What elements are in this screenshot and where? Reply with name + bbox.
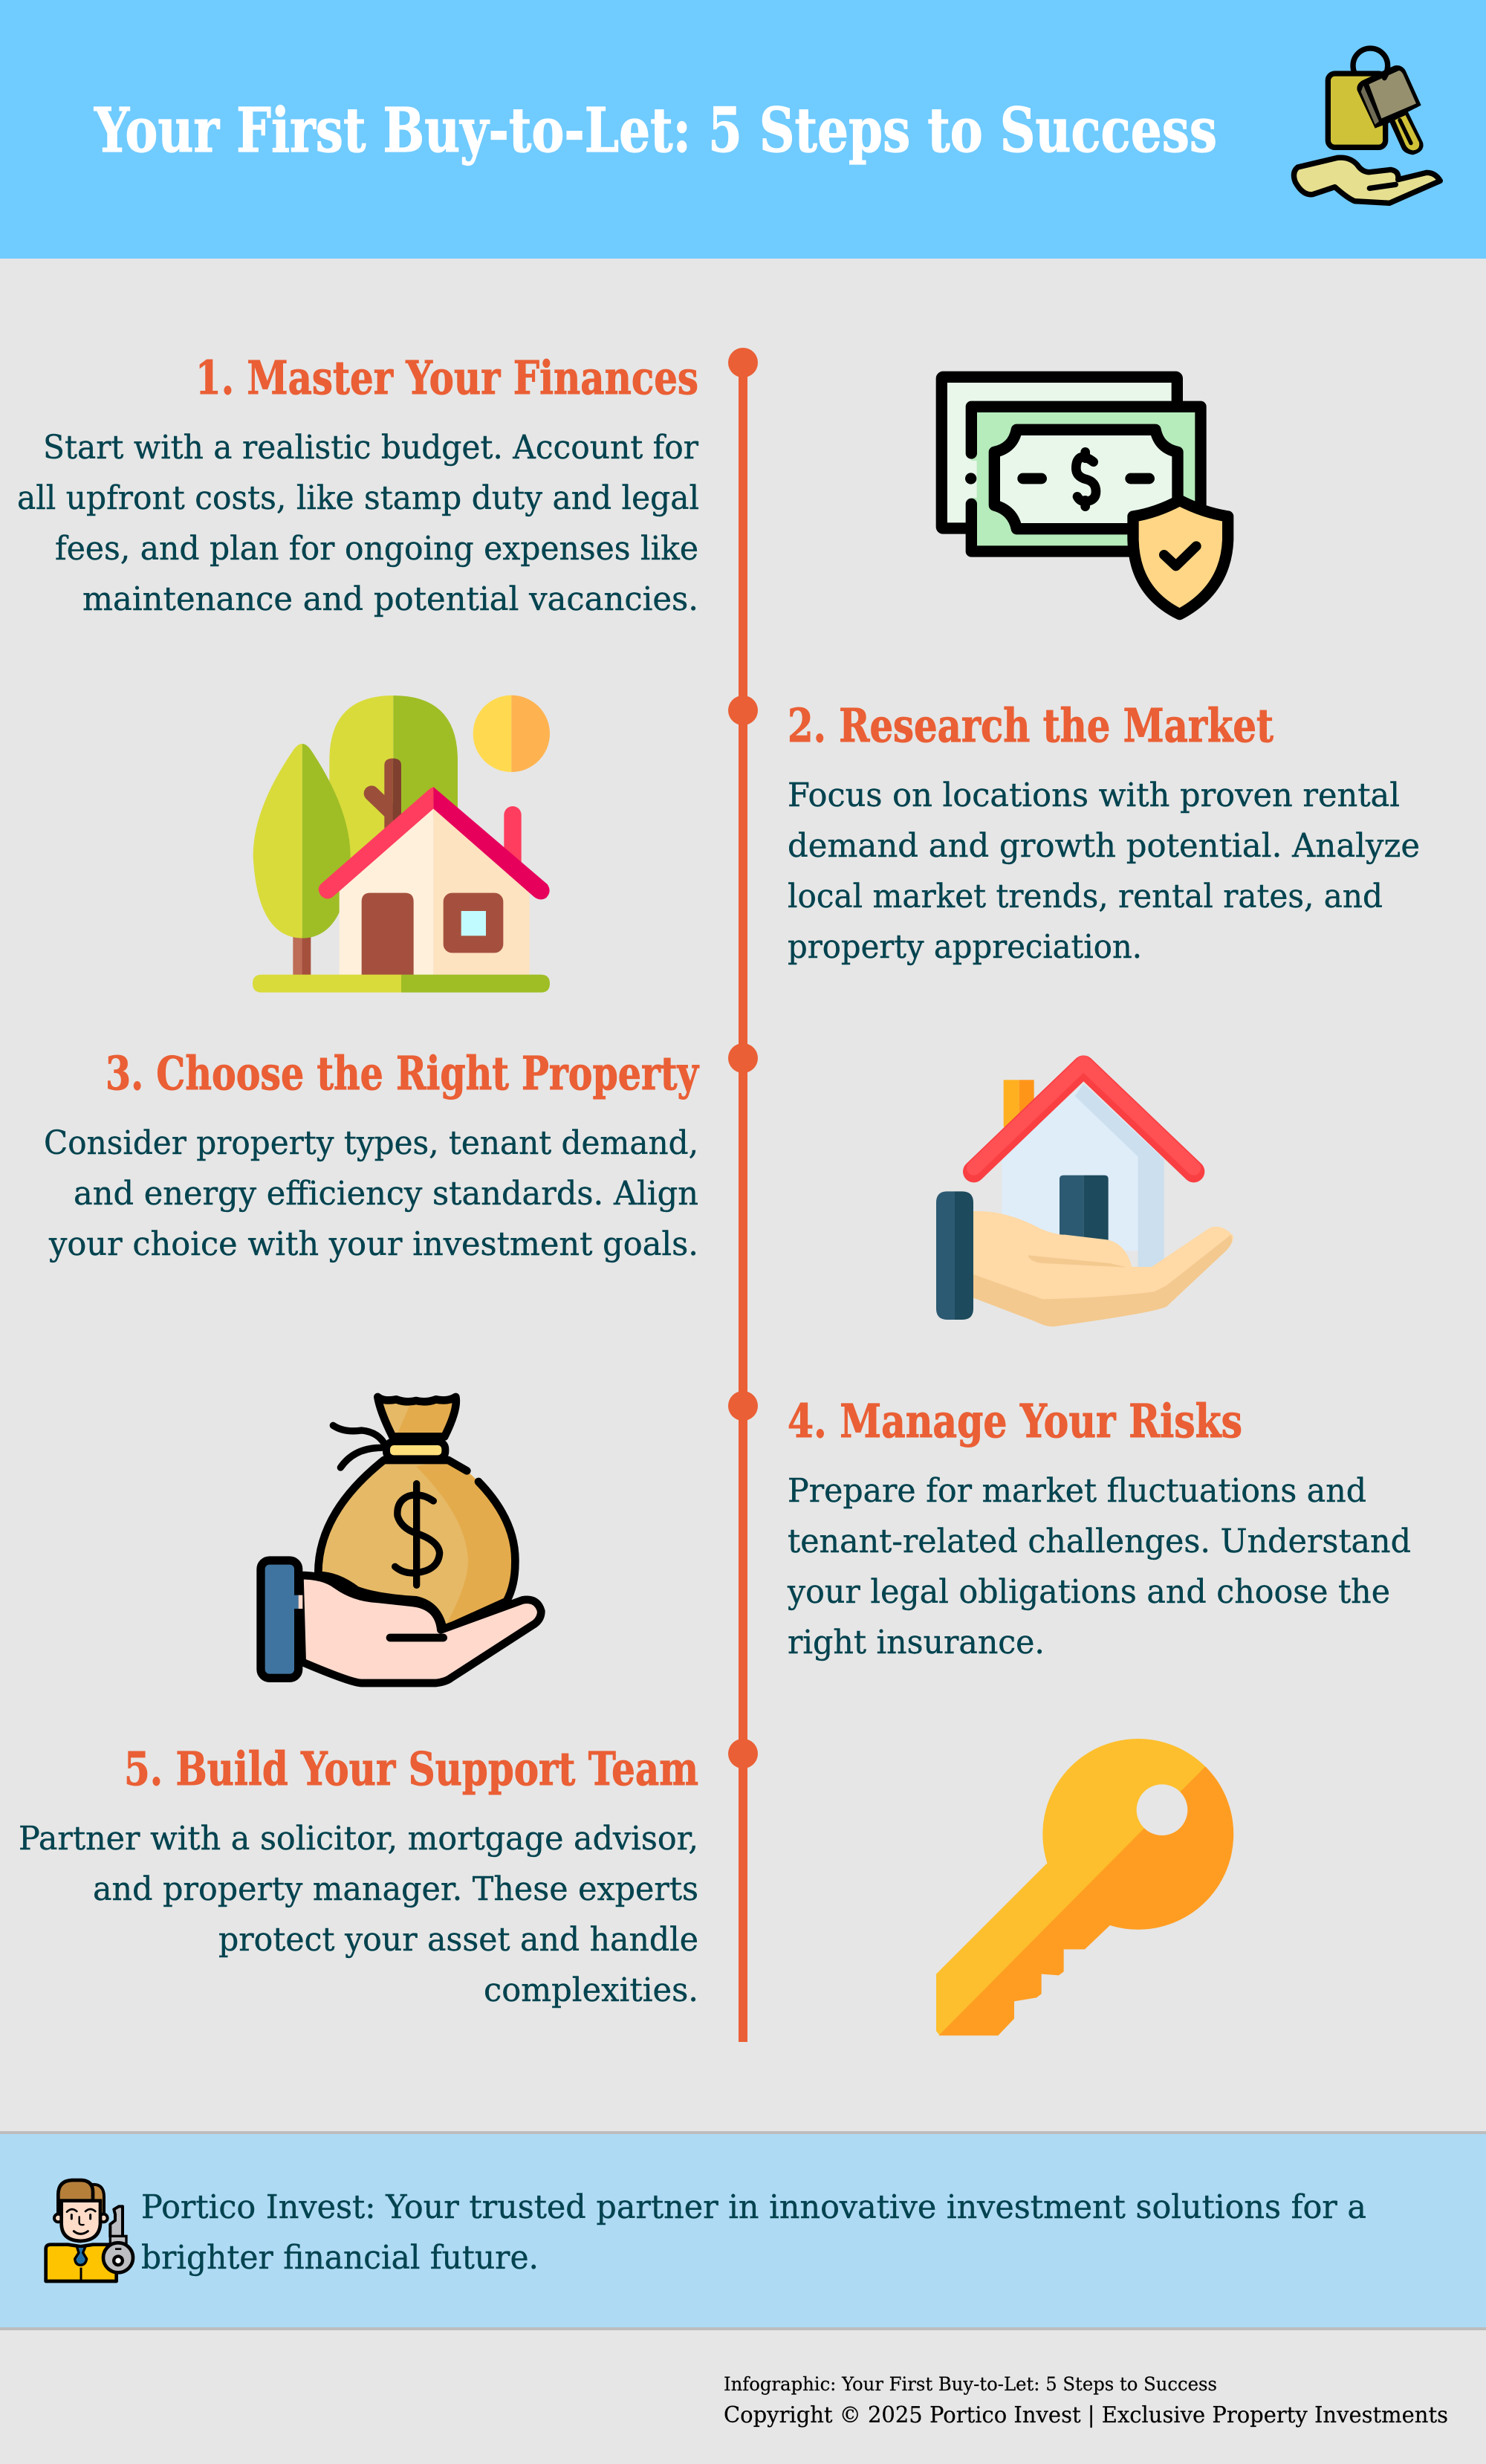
- heading: step 5: 5. Build Your Support Team: [124, 1742, 698, 1796]
- panel: step 4 text: [787, 1394, 1411, 1661]
- text block: step 1: all upfront costs, like stamp duty and legal: [17, 479, 699, 517]
- copyright line: Copyright © 2025 Portico Invest | Exclusive Property Investments: [724, 2402, 1448, 2428]
- icon: house in hand: [936, 1063, 1233, 1326]
- panel: step 2 text: [788, 698, 1420, 966]
- header banner: [0, 0, 1486, 259]
- text block: step 2: property appreciation.: [788, 928, 1142, 966]
- text block: statement: [141, 2188, 1366, 2277]
- text block: step 5: protect your asset and handle: [218, 1921, 698, 1959]
- text block: step 3: Consider property types, tenant demand,: [44, 1124, 698, 1162]
- text block: step 2: Focus on locations with proven rental: [788, 777, 1400, 814]
- title: Your First Buy-to-Let: 5 Steps to Success: [94, 95, 1217, 166]
- panel: step 3 text: [44, 1046, 700, 1263]
- text block: step 1: fees, and plan for ongoing expenses like: [55, 530, 698, 568]
- text block: step 4: [787, 1472, 1411, 1661]
- icon: keys over hand: [1294, 48, 1440, 203]
- timeline: [728, 348, 758, 2042]
- icon: key: [936, 1739, 1233, 2035]
- text block: statement: brighter financial future.: [141, 2239, 539, 2277]
- text block: step 3: [44, 1124, 698, 1263]
- text block: step 5: complexities.: [484, 1971, 698, 2009]
- text block: step 1: Start with a realistic budget. Account for: [43, 429, 699, 467]
- text block: step 2: demand and growth potential. Analyze: [788, 827, 1420, 865]
- text block: step 4: tenant-related challenges. Understand: [788, 1523, 1411, 1560]
- text block: step 4: your legal obligations and choose the: [787, 1573, 1390, 1611]
- icon: house with trees: [253, 696, 550, 993]
- text block: step 3: and energy efficiency standards. Align: [74, 1175, 698, 1213]
- text block: step 4: right insurance.: [788, 1624, 1045, 1661]
- text block: step 3: your choice with your investment goals.: [48, 1225, 698, 1263]
- text block: step 1: [17, 429, 699, 618]
- text block: step 5: [19, 1820, 698, 2009]
- footer: [724, 2373, 1448, 2428]
- footer title line: Infographic: Your First Buy-to-Let: 5 Steps to Success: [724, 2373, 1217, 2395]
- banner: company statement: [0, 2131, 1486, 2330]
- heading: step 2: 2. Research the Market: [788, 698, 1274, 753]
- text block: step 2: local market trends, rental rates, and: [788, 878, 1383, 915]
- text block: step 4: Prepare for market fluctuations and: [788, 1472, 1366, 1510]
- icon: money with shield: [941, 377, 1228, 615]
- heading: step 4: 4. Manage Your Risks: [788, 1394, 1242, 1448]
- icon: money bag in hand: [261, 1397, 541, 1683]
- heading: step 3: 3. Choose the Right Property: [106, 1046, 700, 1100]
- heading: step 1: 1. Master Your Finances: [195, 351, 698, 405]
- text block: step 5: and property manager. These experts: [93, 1870, 698, 1908]
- panel: step 5 text: [19, 1742, 698, 2009]
- text block: step 1: maintenance and potential vacancies.: [82, 580, 698, 618]
- panel: step 1 text: [17, 351, 699, 618]
- text block: step 5: Partner with a solicitor, mortgage advisor,: [19, 1820, 698, 1858]
- text block: step 2: [788, 777, 1420, 966]
- text block: statement: Portico Invest: Your trusted partner in innovative investment solutions for a: [141, 2188, 1366, 2226]
- icon: agent with key: [46, 2180, 133, 2281]
